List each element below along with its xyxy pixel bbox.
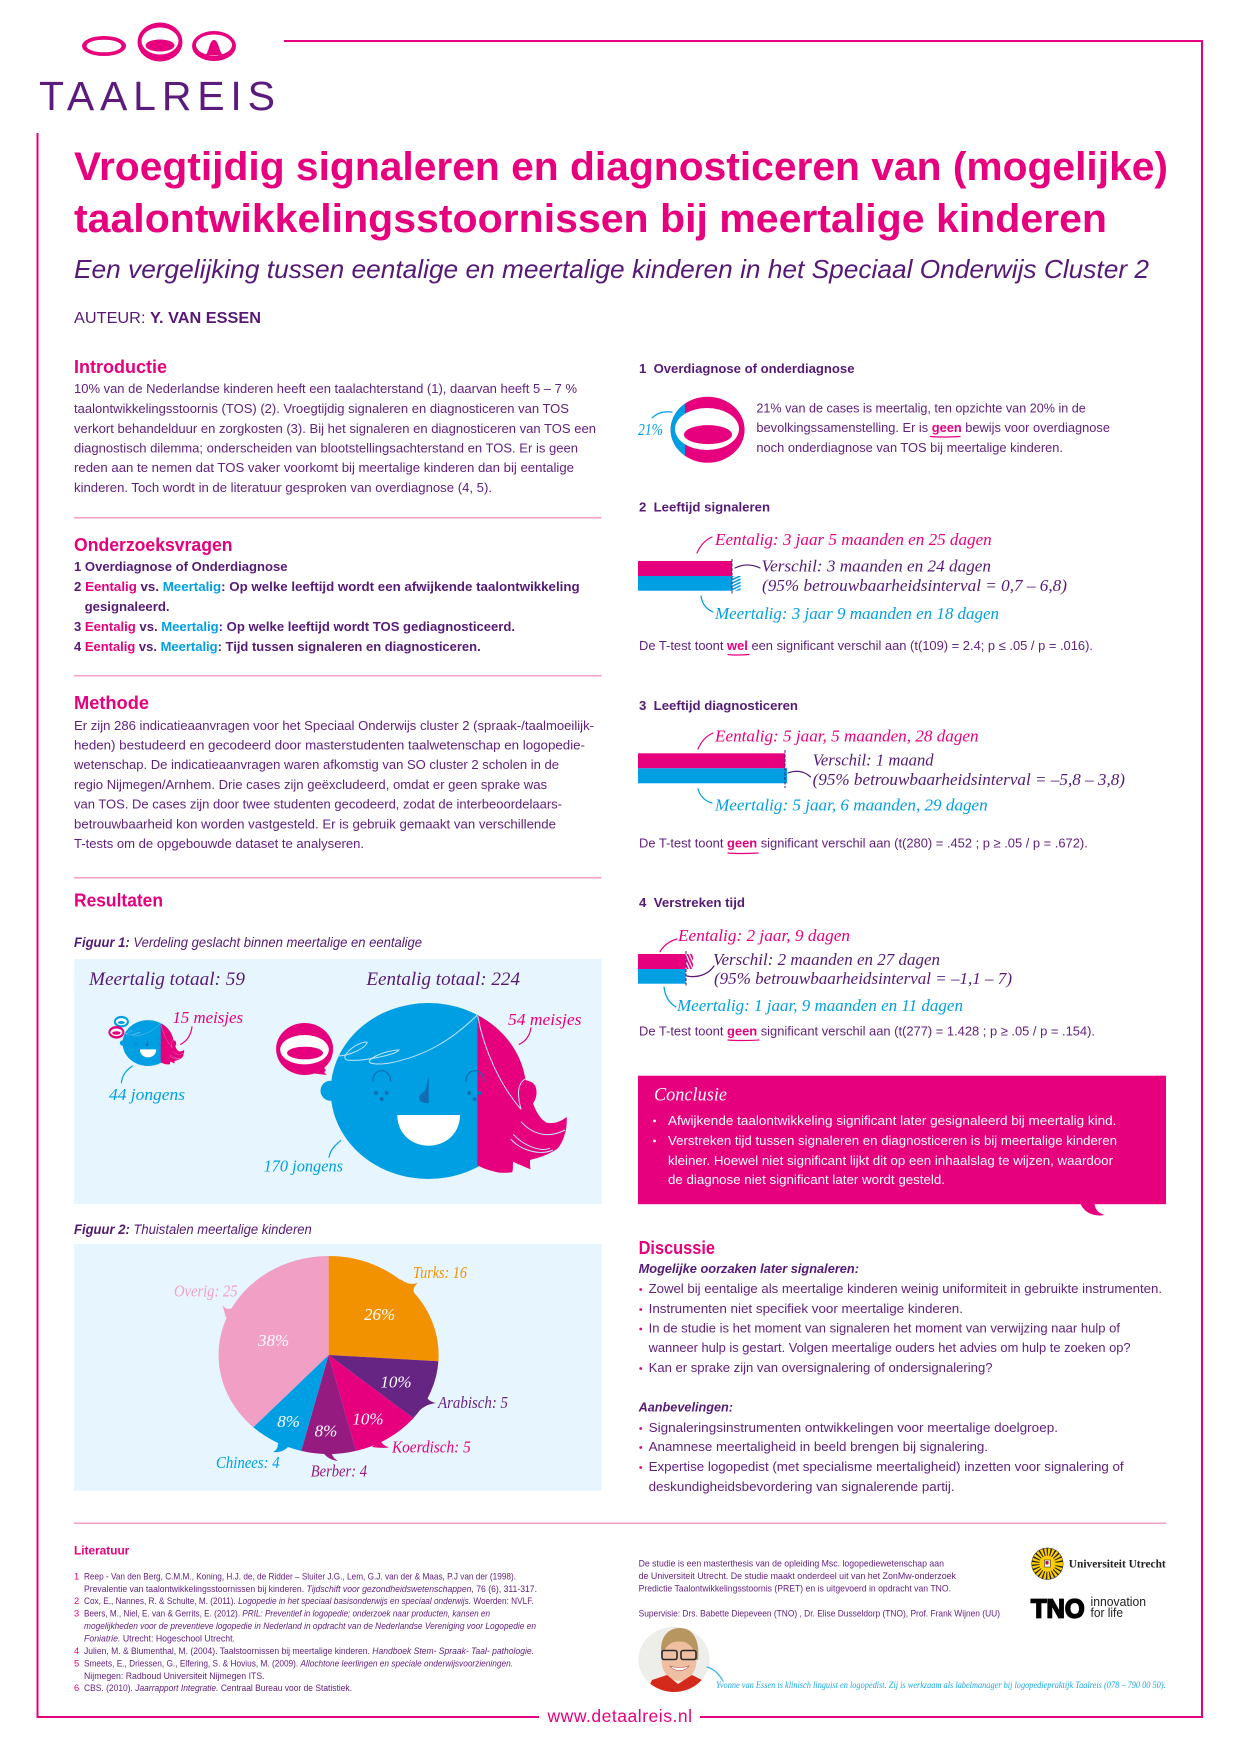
panel: methode: wetenschap. De indicatieaanvragen waren afkomstig van SO cluster 2 scholen in de (73, 757, 559, 772)
panel: literatuur: 2 (74, 1596, 79, 1606)
panel: onderzoeksvragen (74, 535, 580, 654)
title: Vroegtijdig signaleren en diagnosticeren van (mogelijke) (74, 145, 1168, 189)
t-test result: De T-test toont geen significant verschil aan (t(277) = 1.428 ; p ≥ .05 / p = .154). (639, 1024, 1095, 1039)
panel: methode: heden) bestudeerd en gecodeerd door masterstudenten taalwetenschap en logopedie- (74, 738, 585, 753)
label: 15 meisjes: 15 meisjes (172, 1008, 243, 1027)
pie values: 10% (380, 1373, 412, 1392)
logo: TNO: innovation (1090, 1595, 1146, 1609)
callout: conclusie (638, 1076, 1166, 1215)
panel: introductie: taalontwikkelingsstoornis (TOS) (2). Vroegtijdig signaleren en diagnosticeren van TOS (74, 401, 569, 416)
label: meertalig (664, 987, 963, 1015)
panel: methode (73, 693, 594, 851)
text: colofon: De studie is een masterthesis van de opleiding Msc. logopediewetenschap aan (639, 1559, 944, 1569)
pie legend labels: Arabisch: 5 (437, 1393, 508, 1412)
panel: literatuur: 5 (74, 1659, 79, 1669)
panel: methode: betrouwbaarheid kon worden vastgesteld. Er is gebruik gemaakt van verschillende (74, 817, 556, 832)
panel: literatuur: Reep - Van den Berg, C.M.M., Koning, H.J. de, de Ridder – Sluiter J.G., Lem, G.J. van der & Maas, P.J van der (1998). (84, 1571, 516, 1581)
label: meertalig: Meertalig: 3 jaar 9 maanden en 18 dagen (714, 604, 999, 623)
panel: introductie: 10% van de Nederlandse kinderen heeft een taalachterstand (1), daarvan heeft 5 – 7 % (74, 381, 577, 396)
panel: discussie: Zowel bij eentalige als meertalige kinderen weinig uniformiteit in gebruikte instrumenten. (649, 1281, 1162, 1296)
label: verschil: Verschil: 3 maanden en 24 dagen (762, 557, 991, 576)
label: 54 meisjes: 54 meisjes (508, 1010, 582, 1029)
callout: conclusie: de diagnose niet significant later wordt gesteld. (668, 1172, 945, 1187)
panel: literatuur: 1 (74, 1571, 79, 1581)
panel: onderzoeksvragen: Onderzoeksvragen (74, 535, 232, 555)
callout: conclusie: Verstreken tijd tussen signaleren en diagnosticeren is bij meertalige kinderen (668, 1133, 1117, 1148)
label: verschil (735, 557, 1067, 595)
pie legend labels: Overig: 25 (174, 1282, 238, 1301)
pie values: 8% (315, 1422, 337, 1441)
label: meertalig (698, 789, 988, 815)
pie values: 10% (352, 1410, 384, 1429)
logo: Universiteit Utrecht (1031, 1548, 1166, 1580)
panel: introductie: Introductie (74, 357, 167, 377)
label: 44 jongens (109, 1066, 185, 1104)
photo caption (707, 1667, 1166, 1690)
text: colofon: Predictie Taalontwikkelingsstoornis (PRET) en is uitgevoerd in opdracht van TNO. (639, 1584, 951, 1594)
panel: introductie: kinderen. Toch wordt in de literatuur gesproken van overdiagnose (4, 5). (74, 480, 492, 495)
panel: discussie: Discussie (639, 1238, 715, 1258)
label: 21% (638, 412, 672, 439)
panel: literatuur: CBS. (2010). Jaarrapport Integratie. Centraal Bureau voor de Statistiek. (84, 1683, 352, 1693)
pie values (257, 1305, 412, 1441)
text: overdiagnose toelichting: 21% van de cases is meertalig, ten opzichte van 20% in de (756, 401, 1086, 416)
bar chart (638, 559, 741, 594)
panel: methode: Er zijn 286 indicatieaanvragen voor het Speciaal Onderwijs cluster 2 (spraak-/taalmoeilijk- (74, 718, 594, 733)
panel: discussie: Expertise logopedist (met specialisme meertaligheid) inzetten voor signalering of (649, 1459, 1124, 1474)
panel: onderzoeksvragen: 2 Eentalig vs. Meertalig: Op welke leeftijd wordt een afwijkende taalontwikkeling (74, 579, 580, 594)
panel: literatuur: Foniatrie. Utrecht: Hogeschool Utrecht. (84, 1634, 235, 1644)
label: verschil: (95% betrouwbaarheidsinterval = 0,7 – 6,8) (762, 576, 1067, 595)
label: 54 meisjes (508, 1010, 582, 1044)
section 2: leeftijd signaleren: 2 Leeftijd signaleren (639, 500, 770, 515)
callout: conclusie: Afwijkende taalontwikkeling significant later gesignaleerd bij meertalig kind. (668, 1113, 1116, 1128)
logo: TNO: for life (1090, 1606, 1123, 1620)
panel: methode: van TOS. De cases zijn door twee studenten gecodeerd, zodat de interbeoordelaars- (74, 797, 562, 812)
icon: large face (320, 1003, 567, 1179)
section 1: overdiagnose: 1 Overdiagnose of onderdiagnose (639, 361, 854, 376)
bar chart (638, 951, 693, 987)
section 2: leeftijd signaleren (638, 500, 1093, 655)
panel: introductie: reden aan te nemen dat TOS vaker voorkomt bij meertalige kinderen dan bij eentalige (74, 460, 574, 475)
pie legend labels: Turks: 16 (413, 1263, 467, 1282)
title (74, 145, 1168, 241)
donut chart 21% (671, 397, 745, 463)
label: meertalig: Meertalig: 5 jaar, 6 maanden, 29 dagen (714, 796, 988, 815)
section 1: overdiagnose (638, 361, 1110, 463)
caption: figuur 2: Figuur 2: Thuistalen meertalige kinderen (74, 1222, 312, 1237)
panel: discussie: wanneer hulp is gestart. Volgen meertalige ouders het advies om hulp te zoeken op? (648, 1340, 1131, 1355)
panel: literatuur: 6 (74, 1683, 79, 1693)
text: overdiagnose toelichting (756, 401, 1110, 455)
pie values: 26% (364, 1305, 395, 1324)
t-test result: De T-test toont geen significant verschil aan (t(280) = .452 ; p ≥ .05 / p = .672). (639, 836, 1088, 851)
subtitle: Een vergelijking tussen eentalige en meertalige kinderen in het Speciaal Onderwijs Cluster 2 (74, 254, 1150, 284)
portrait photo (638, 1627, 710, 1692)
author: AUTEUR: Y. VAN ESSEN (74, 310, 261, 327)
panel: introductie: diagnostisch dilemma; onderscheiden van blootstellingsachterstand en TOS. Er is geen (74, 441, 578, 456)
text: overdiagnose toelichting: noch onderdiagnose van TOS bij meertalige kinderen. (756, 440, 1063, 455)
logo: Universiteit Utrecht: Universiteit Utrecht (1069, 1559, 1166, 1571)
label: verschil (687, 950, 1012, 988)
panel: literatuur: Smeets, E., Driessen, G., Elfering, S. & Hovius, M. (2009). Allochtone leerlingen en speciale onderwijsvoorzieningen. (84, 1659, 513, 1669)
section 4: verstreken tijd (638, 895, 1095, 1041)
panel: literatuur: Cox, E., Nannes, R. & Schulte, M. (2011). Logopedie in het speciaal basisonderwijs en speciaal onderwijs. Woerden: NVLF. (84, 1596, 534, 1606)
section 3: leeftijd diagnosticeren (638, 698, 1125, 854)
panel: discussie: Mogelijke oorzaken later signaleren: (639, 1261, 859, 1276)
photo caption: Yvonne van Essen is klinisch linguist en logopedist. Zij is werkzaam als labelmanager bij logopediepraktijk Taalreis (078 – 790 00 50). (716, 1680, 1166, 1690)
label: 170 jongens (264, 1141, 343, 1176)
pie legend labels: Berber: 4 (311, 1462, 367, 1481)
panel: discussie: Aanbevelingen: (638, 1400, 733, 1415)
logo: Taalreis: TAALREIS (39, 73, 275, 119)
panel: discussie: Kan er sprake zijn van oversignalering of ondersignalering? (649, 1360, 992, 1375)
panel: onderzoeksvragen: gesignaleerd. (85, 599, 170, 614)
panel: literatuur: Prevalentie van taalontwikkelingsstoornissen bij kinderen. Tijdschift voor gezondheidswetenschappen, 76 (6), 311-317. (84, 1584, 537, 1594)
pie legend labels: Koerdisch: 5 (391, 1438, 471, 1457)
panel: discussie (638, 1238, 1162, 1494)
panel: introductie: verkort behandelduur en zorgkosten (3). Bij het signaleren en diagnosticeren van TOS een (74, 421, 596, 436)
panel: literatuur: Julien, M. & Blumenthal, M. (2004). Taalstoornissen bij meertalige kinderen. Handboek Stem- Spraak- Taal- pathologie. (84, 1646, 534, 1656)
label: eentalig: Eentalig: 3 jaar 5 maanden en 25 dagen (714, 530, 992, 549)
panel: literatuur: Literatuur (74, 1545, 130, 1557)
panel: methode: T-tests om de opgebouwde dataset te analyseren. (74, 836, 364, 851)
label: 170 jongens: 170 jongens (264, 1157, 343, 1176)
icon: speech bubble (276, 1023, 333, 1075)
panel: literatuur: Nijmegen: Radboud Universiteit Nijmegen ITS. (84, 1671, 265, 1681)
label: verschil: Verschil: 1 maand (813, 751, 934, 770)
heading: resultaten: Resultaten (74, 891, 163, 911)
panel: literatuur: 4 (74, 1646, 79, 1656)
panel: figuur 1 (74, 959, 602, 1204)
icon: small face (120, 1020, 184, 1066)
label: meertalig: Meertalig: 1 jaar, 9 maanden en 11 dagen (676, 996, 963, 1015)
pie chart (219, 1256, 439, 1461)
callout: conclusie: kleiner. Hoewel niet significant lijkt dit op een inhaalslag te wijzen, waardoor (668, 1153, 1114, 1168)
logo: TNO (1031, 1594, 1146, 1624)
pie values: 38% (257, 1331, 289, 1350)
panel: methode: regio Nijmegen/Arnhem. Drie cases zijn geëxcludeerd, omdat er geen sprake was (74, 777, 547, 792)
panel: literatuur: Beers, M., Niel, E. van & Gerrits, E. (2012). PRIL: Preventief in logopedie; onderzoek naar producten, kansen en (84, 1609, 490, 1619)
panel: onderzoeksvragen: 4 Eentalig vs. Meertalig: Tijd tussen signaleren en diagnosticeren. (74, 639, 481, 654)
logo: TNO: TNO (1031, 1594, 1085, 1624)
text: colofon: Supervisie: Drs. Babette Diepeveen (TNO) , Dr. Elise Dusseldorp (TNO), Prof. Frank Wijnen (UU) (639, 1609, 1000, 1619)
panel: discussie: Instrumenten niet specifiek voor meertalige kinderen. (649, 1301, 963, 1316)
website url: www.detaalreis.nl (546, 1706, 692, 1726)
heading: eentalig totaal: Eentalig totaal: 224 (365, 969, 520, 990)
caption: figuur 1: Figuur 1: Verdeling geslacht binnen meertalige en eentalige (74, 935, 422, 950)
text: overdiagnose toelichting: bevolkingssamenstelling. Er is geen bewijs voor overdiagnose (756, 420, 1110, 435)
label: verschil: (95% betrouwbaarheidsinterval = –1,1 – 7) (714, 969, 1012, 988)
label: meertalig (701, 596, 999, 623)
panel: onderzoeksvragen: 1 Overdiagnose of Onderdiagnose (74, 559, 288, 574)
text: colofon: de Universiteit Utrecht. De studie maakt onderdeel uit van het ZonMw-onderzoek (639, 1571, 956, 1581)
callout: conclusie: Conclusie (654, 1085, 727, 1106)
label: 44 jongens: 44 jongens (109, 1085, 185, 1104)
label: eentalig (660, 926, 850, 952)
text: colofon (639, 1559, 1000, 1619)
panel: introductie (74, 357, 596, 495)
panel: literatuur: mogelijkheden voor de preventieve logopedie in Nederland in opdracht van de Nederlandse Vereniging voor Logopedie en (84, 1621, 536, 1631)
label: 15 meisjes (172, 1008, 243, 1044)
panel: figuur 2 (74, 1244, 602, 1491)
label: verschil: (95% betrouwbaarheidsinterval = –5,8 – 3,8) (813, 770, 1125, 789)
pie legend labels (174, 1263, 508, 1481)
pie legend labels: Chinees: 4 (216, 1453, 280, 1472)
label: verschil: Verschil: 2 maanden en 27 dagen (713, 950, 940, 969)
panel: literatuur (74, 1545, 537, 1693)
section 3: leeftijd diagnosticeren: 3 Leeftijd diagnosticeren (639, 698, 798, 713)
label: eentalig: Eentalig: 2 jaar, 9 dagen (677, 926, 850, 945)
panel: discussie: Signaleringsinstrumenten ontwikkelingen voor meertalige doelgroep. (649, 1420, 1058, 1435)
panel: discussie: Anamnese meertaligheid in beeld brengen bij signalering. (649, 1439, 988, 1454)
panel: methode: Methode (74, 693, 149, 713)
logo: Taalreis (39, 22, 275, 119)
icon: small speech bubbles (108, 1016, 129, 1039)
panel: onderzoeksvragen: 3 Eentalig vs. Meertalig: Op welke leeftijd wordt TOS gediagnosticeerd. (74, 619, 515, 634)
bar chart (638, 750, 787, 788)
label: 21%: 21% (638, 420, 663, 439)
heading: meertalig totaal: Meertalig totaal: 59 (88, 969, 245, 990)
pie values: 8% (277, 1412, 300, 1431)
label: verschil (788, 751, 1125, 789)
t-test result: De T-test toont wel een significant verschil aan (t(109) = 2.4; p ≤ .05 / p = .016). (639, 638, 1093, 653)
panel: discussie: deskundigheidsbevordering van signalerende partij. (649, 1479, 955, 1494)
title: taalontwikkelingsstoornissen bij meertalige kinderen (74, 197, 1107, 241)
section 4: verstreken tijd: 4 Verstreken tijd (639, 895, 745, 910)
label: eentalig: Eentalig: 5 jaar, 5 maanden, 28 dagen (714, 727, 979, 746)
panel: discussie: In de studie is het moment van signaleren het moment van verwijzing naar hulp of (649, 1321, 1120, 1336)
panel: literatuur: 3 (74, 1609, 79, 1619)
